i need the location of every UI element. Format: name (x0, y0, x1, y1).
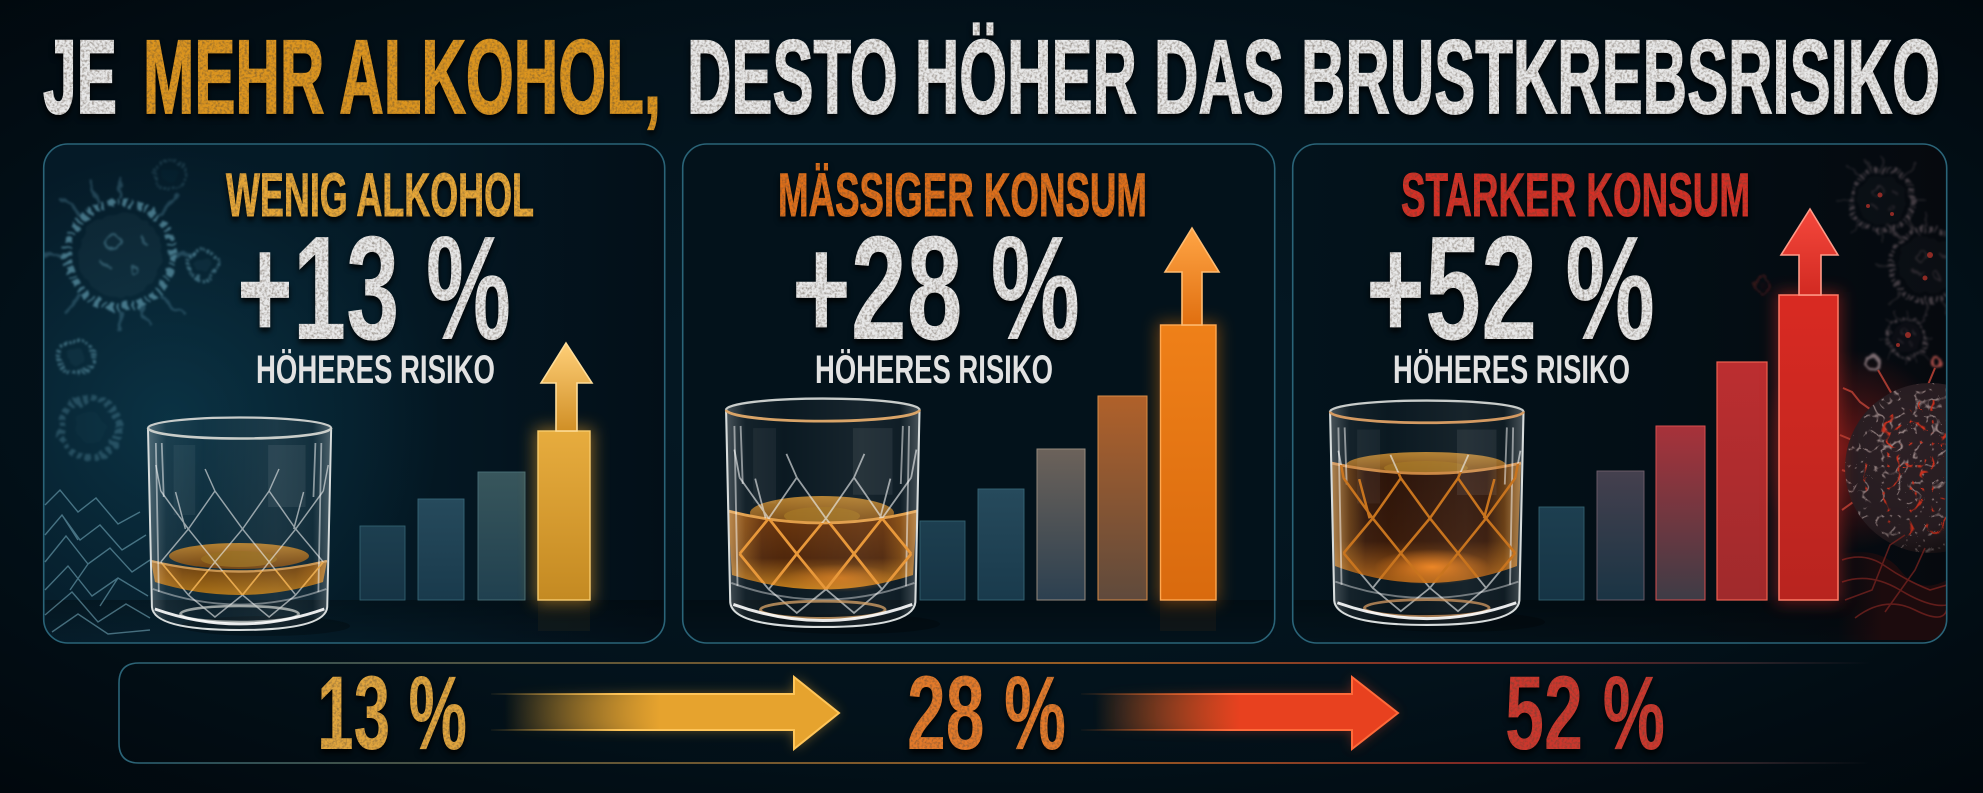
subtitle: HÖHERES RISIKO (256, 347, 495, 392)
panel heading: STARKER KONSUM (1401, 161, 1750, 229)
icon: glass (1330, 401, 1524, 625)
liquid (728, 496, 940, 634)
panel: wenig Alkohol (42, 144, 665, 643)
value 13 %: 13 % (317, 655, 467, 772)
bar chart (1539, 209, 1841, 603)
subtitle: HÖHERES RISIKO (815, 347, 1053, 392)
arrow (1781, 209, 1838, 295)
icon: virus decoration (42, 161, 217, 634)
big percentage: +52 % (1366, 206, 1655, 371)
title: MEHR ALKOHOL, (143, 19, 661, 136)
icon: glass (726, 399, 920, 627)
panel heading: MÄSSIGER KONSUM (778, 161, 1147, 229)
big percentage: +13 % (237, 206, 511, 371)
title: JE (43, 19, 117, 136)
icon: glass (148, 418, 331, 630)
icon: tumour cell (1751, 156, 1946, 640)
progression bar (119, 655, 1875, 772)
panel: starker Konsum (1292, 144, 1983, 643)
arrow (541, 343, 592, 431)
bar chart (920, 228, 1219, 631)
value 28 %: 28 % (907, 655, 1066, 772)
subtitle: HÖHERES RISIKO (1393, 347, 1630, 392)
liquid (151, 543, 350, 636)
panel: mäßiger Konsum (682, 144, 1275, 643)
liquid (1331, 452, 1545, 632)
bar chart (360, 343, 593, 631)
value 52 %: 52 % (1505, 655, 1665, 772)
title (43, 19, 1940, 136)
big percentage: +28 % (792, 206, 1080, 371)
arrow (1081, 677, 1398, 749)
arrow (1165, 228, 1219, 325)
arrow (491, 677, 839, 749)
panel heading: WENIG ALKOHOL (226, 161, 534, 229)
